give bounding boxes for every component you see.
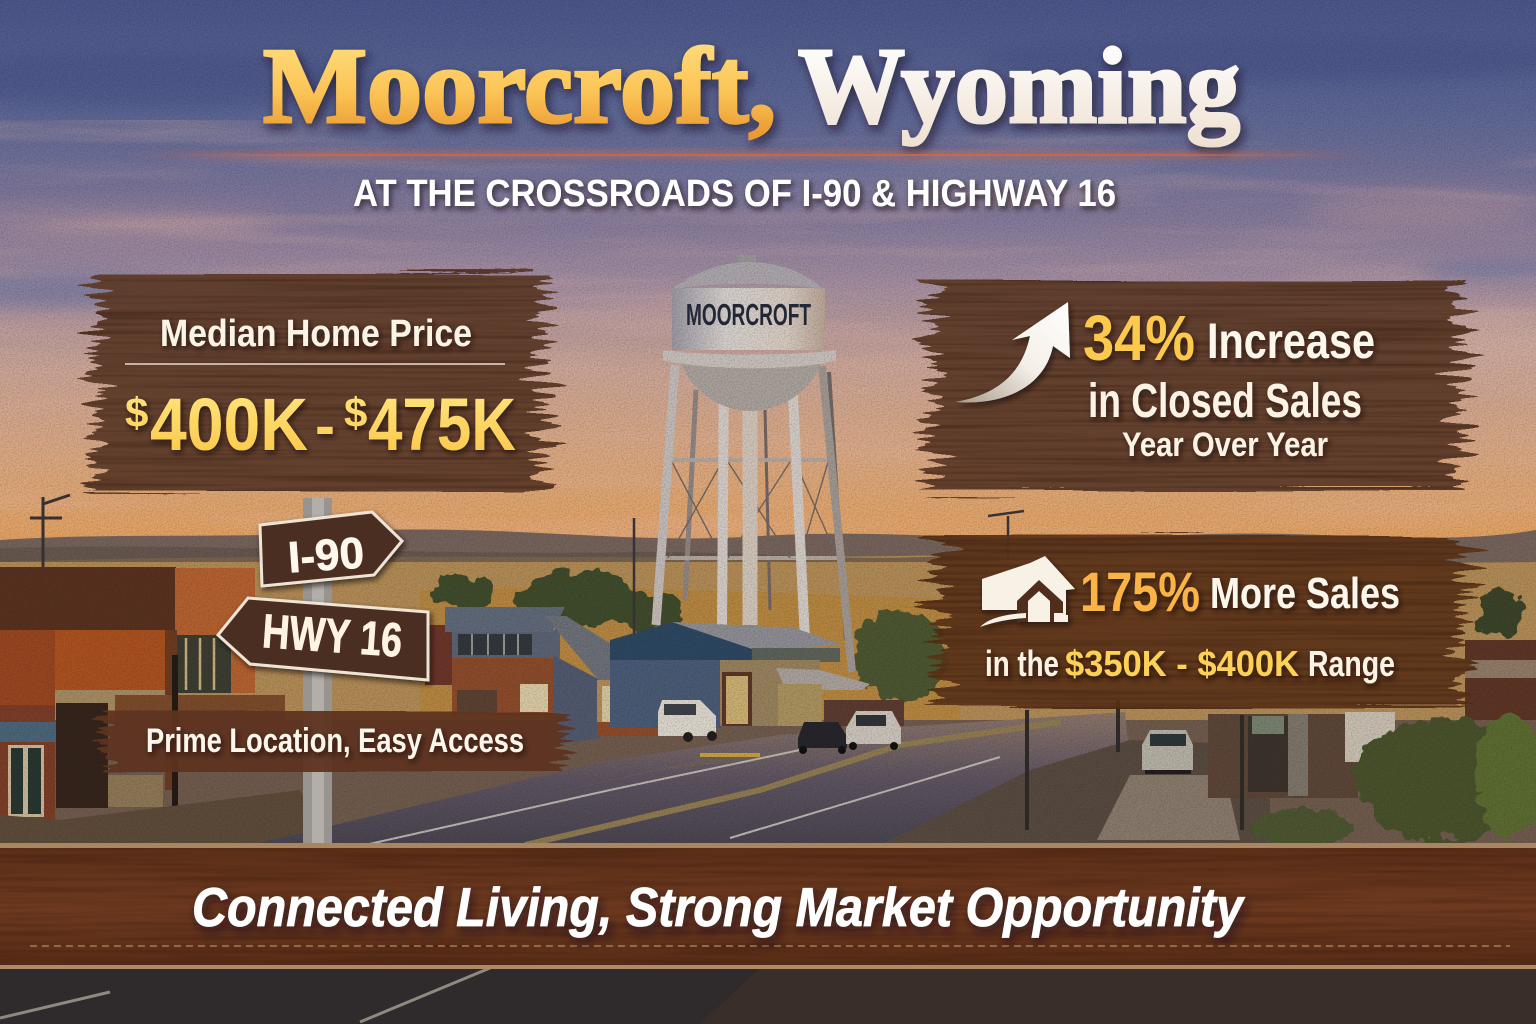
text: price range (985, 643, 1395, 684)
background: distant hills and fields (0, 529, 1536, 720)
stat: 175% more sales: 175% (1080, 560, 1200, 623)
background: sky (0, 0, 1536, 570)
sign: HWY 16: HWY 16 (261, 605, 404, 668)
title (263, 27, 1240, 146)
stat: 175% more sales: More Sales (1210, 569, 1400, 618)
price range: $ (125, 389, 148, 436)
price range: 475K (368, 383, 516, 466)
price range: 400K (150, 383, 308, 466)
sign: I-90 (260, 512, 402, 586)
brush background (95, 272, 543, 494)
panel: median home price (95, 272, 543, 494)
text: price range: in the (985, 643, 1059, 684)
centre-left houses (425, 607, 663, 745)
price range: - (315, 392, 335, 459)
background: street lamps (634, 511, 1024, 720)
icon: rising arrow (955, 302, 1070, 403)
parked cars (658, 700, 1193, 774)
water tower (656, 255, 852, 672)
centre blue building (610, 622, 904, 728)
banner: tagline (0, 843, 1536, 969)
right side buildings and shrubs (1027, 640, 1536, 846)
tower legs (656, 356, 852, 672)
text: in closed sales: in Closed Sales (1088, 375, 1362, 428)
title: Wyoming (798, 27, 1240, 146)
subtitle: AT THE CROSSROADS OF I-90 & HIGHWAY 16 (353, 173, 1116, 215)
panel: prime location: Prime Location, Easy Access (146, 722, 524, 760)
ground behind buildings (0, 720, 1536, 845)
left brick buildings (0, 567, 330, 850)
text: price range: $350K - $400K (1065, 643, 1299, 684)
trees (428, 570, 1524, 701)
background: telegraph pole (30, 495, 70, 568)
stat: 34% increase: 34% (1083, 302, 1195, 374)
heading: median home price: Median Home Price (160, 313, 472, 355)
sign: I-90: I-90 (286, 528, 366, 583)
price range: $ (344, 389, 367, 436)
tagline text: Connected Living, Strong Market Opportunity (192, 876, 1245, 938)
panel: closed sales increase (930, 280, 1460, 490)
sign: HWY 16 (218, 598, 428, 680)
signpost (218, 498, 428, 845)
road and pavement (250, 712, 1270, 845)
tower lettering: MOORCROFT (686, 297, 811, 332)
icon: house (980, 556, 1075, 627)
text: year over year: Year Over Year (1122, 426, 1328, 464)
tower tank (672, 288, 825, 350)
tower bowl (680, 360, 822, 411)
stat: 34% increase (1083, 302, 1375, 374)
text: price range: Range (1308, 643, 1395, 684)
stat: 175% more sales (1080, 560, 1400, 623)
bottom road strip (0, 965, 1536, 1024)
panel: more sales (938, 536, 1462, 706)
title underline (120, 151, 1380, 159)
title: Moorcroft, (263, 27, 776, 146)
panel: prime location (104, 712, 564, 772)
price range (125, 383, 516, 466)
stat: 34% increase: Increase (1207, 313, 1375, 369)
